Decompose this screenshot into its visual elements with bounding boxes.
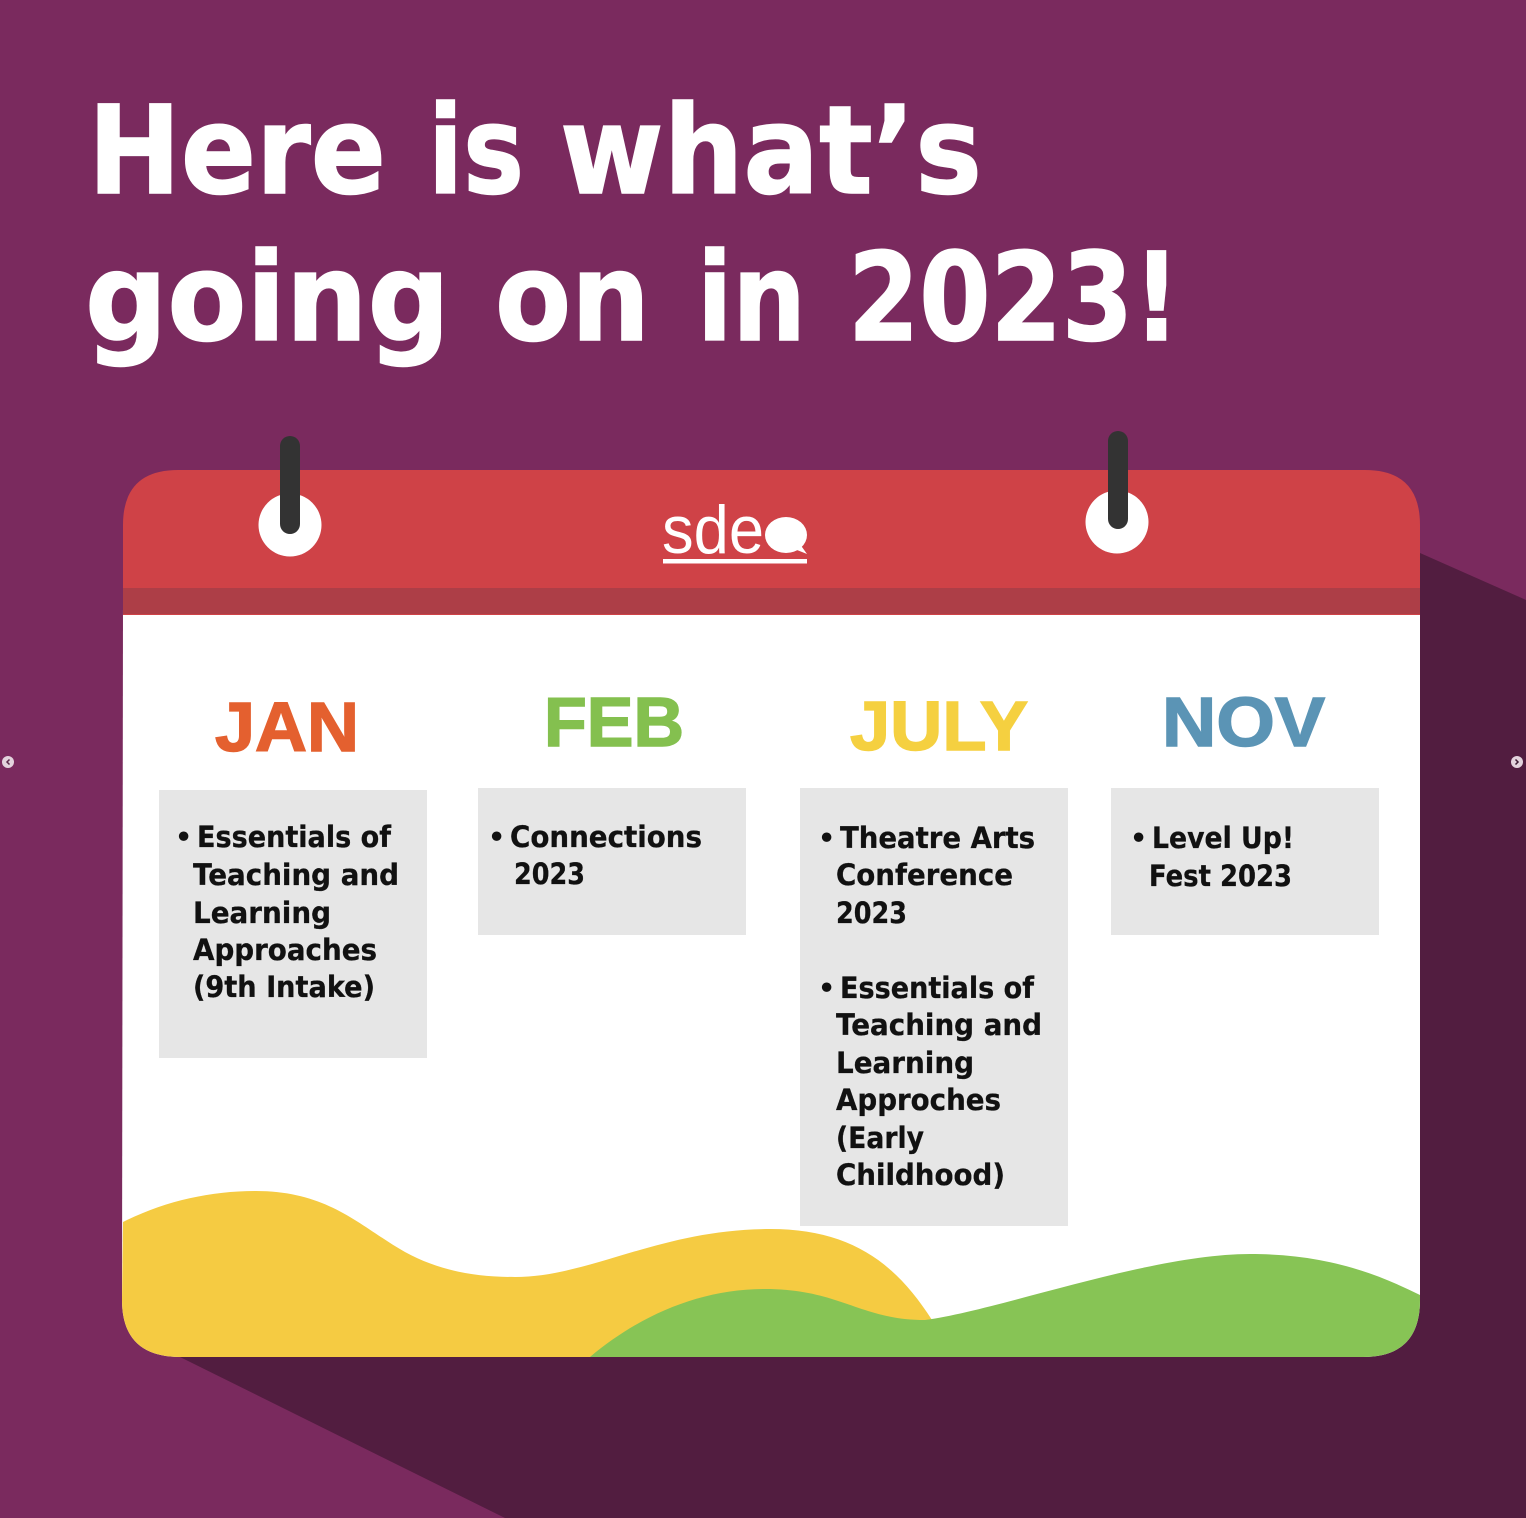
title: in [697, 227, 806, 369]
panel: July events: Childhood) [836, 1158, 1005, 1192]
panel: January events: Approaches [193, 933, 377, 967]
title: 2023! [848, 227, 1180, 369]
calendar header [123, 470, 1420, 615]
calendar page [122, 600, 1420, 1357]
yellow wave [122, 1191, 932, 1357]
panel: November events: Fest 2023 [1149, 859, 1292, 893]
left binder ring [258, 436, 322, 556]
panel: February events [478, 788, 746, 935]
panel: July events: Learning [836, 1046, 974, 1080]
panel: February events: • [488, 822, 505, 853]
panel: July events: 2023 [836, 896, 907, 930]
panel: January events: Learning [193, 896, 331, 930]
title: Here [88, 80, 386, 222]
panel: February events: 2023 [514, 857, 585, 891]
calendar [122, 431, 1420, 1357]
title [85, 80, 1180, 369]
green wave [590, 1254, 1420, 1357]
panel: January events: Teaching and [193, 858, 399, 892]
panel: January events: • [175, 822, 192, 853]
panel: July events [800, 788, 1068, 1226]
icon: left carousel arrow [2, 756, 14, 768]
panel: July events: Approches [836, 1083, 1001, 1117]
month heading: JAN: JAN [215, 688, 359, 766]
panel: November events: Level Up! [1152, 821, 1294, 855]
title: going [85, 227, 450, 369]
panel: November events: • [1130, 823, 1147, 854]
panel: July events: Essentials of [840, 971, 1034, 1005]
month heading: NOV: NOV [1162, 683, 1325, 761]
right binder ring [1086, 431, 1148, 554]
panel: July events: • [818, 973, 835, 1004]
icon: right carousel arrow [1511, 756, 1523, 768]
panel: July events: Teaching and [836, 1008, 1042, 1042]
title: on [495, 227, 650, 369]
month heading: FEB: FEB [544, 683, 684, 761]
panel: January events: (9th Intake) [193, 970, 375, 1004]
panel: July events: Theatre Arts [840, 821, 1035, 855]
panel: July events: Conference [836, 858, 1013, 892]
title: what’s [560, 80, 982, 222]
panel: July events: (Early [836, 1121, 924, 1155]
panel: February events: Connections [510, 820, 702, 854]
panel: January events: Essentials of [197, 820, 391, 854]
panel: January events [159, 790, 427, 1058]
title: is [428, 80, 524, 222]
sdeq logo: sde [662, 492, 764, 568]
panel: July events: • [818, 823, 835, 854]
month heading: JULY: JULY [850, 687, 1028, 765]
panel: November events [1111, 788, 1379, 935]
calendar long shadow [180, 553, 1526, 1518]
